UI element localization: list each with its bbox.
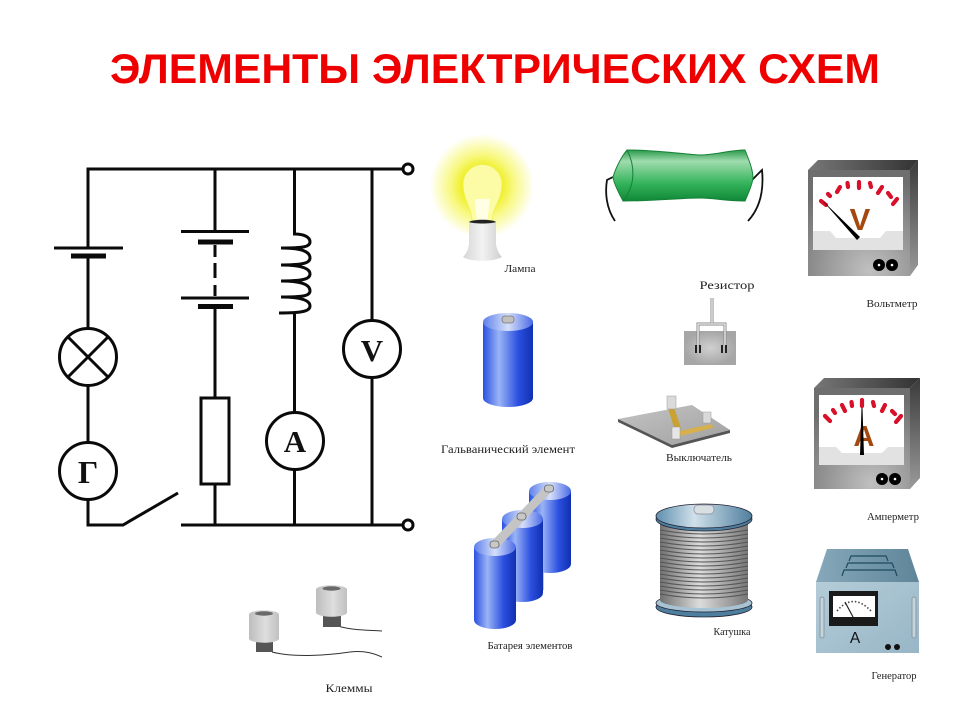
upper flange: [656, 507, 752, 531]
connector tabs: [503, 565, 544, 624]
generator: [816, 549, 919, 682]
label: Резистор: [700, 278, 754, 292]
voltmeter: [808, 160, 918, 310]
connector strap: [491, 485, 552, 548]
right clamp: [316, 585, 347, 627]
letter: A: [854, 421, 875, 453]
generator symbol: Г: [78, 454, 98, 490]
ammeter symbol: A: [284, 424, 307, 459]
label: Амперметр: [867, 512, 919, 523]
dial: [813, 177, 903, 250]
knobs: [885, 644, 900, 650]
terminals: [490, 485, 554, 548]
label: Клеммы: [326, 683, 373, 695]
case: [808, 160, 918, 170]
bulb: [463, 164, 502, 221]
terminals (clamps): [249, 585, 382, 695]
handles: [820, 597, 916, 638]
galvanic cell: [441, 313, 575, 456]
vents: [842, 556, 897, 576]
coil symbol: [279, 169, 310, 412]
voltmeter symbol: [344, 169, 400, 525]
circuit diagram: [54, 164, 413, 530]
resistor symbol: [201, 398, 229, 525]
coil: [656, 504, 752, 638]
source symbol: [54, 248, 123, 329]
cell body: [483, 322, 533, 407]
gauge: [829, 591, 878, 626]
label: Батарея элементов: [488, 640, 572, 652]
cell 2: [502, 510, 543, 602]
left clamp: [249, 610, 279, 652]
cell 3: [529, 482, 571, 573]
battery symbol: [181, 169, 249, 398]
ammeter symbol: [266, 412, 324, 525]
label: Генератор: [872, 671, 916, 682]
scale ticks: [821, 182, 897, 205]
label: Выключатель: [666, 452, 732, 464]
label: Гальванический элемент: [441, 444, 575, 456]
wires: [272, 626, 382, 657]
needle: [860, 408, 864, 455]
switch illustration: [618, 298, 736, 464]
dial: [819, 395, 904, 465]
terminal: [502, 316, 514, 323]
toggle switch on plate: [618, 396, 730, 448]
knobs: [873, 259, 898, 271]
scale ticks: [825, 400, 901, 422]
knife switch: [684, 298, 736, 365]
label: Лампа: [504, 264, 536, 275]
housing: [816, 549, 919, 582]
top wire with terminal: [88, 164, 413, 248]
needle: [822, 200, 860, 240]
body: [613, 150, 753, 201]
generator symbol: [60, 442, 116, 500]
lamp symbol: [60, 328, 116, 443]
lamp base: [463, 222, 502, 261]
letter: A: [850, 630, 861, 647]
switch: [88, 493, 178, 525]
cell 1: [474, 538, 516, 629]
cap: [694, 505, 714, 514]
label: Катушка: [714, 627, 751, 638]
glow: [430, 134, 534, 238]
leads: [606, 170, 762, 221]
knobs: [876, 473, 901, 485]
battery of cells: [474, 482, 572, 652]
letter: V: [850, 202, 871, 237]
case: [814, 378, 920, 388]
resistor: [606, 150, 762, 292]
title: ЭЛЕМЕНТЫ ЭЛЕКТРИЧЕСКИХ СХЕМ: [110, 45, 880, 92]
winding: [660, 522, 748, 608]
voltmeter symbol: V: [361, 333, 384, 368]
bottom wire with terminal: [181, 520, 413, 530]
lower flange: [656, 597, 752, 617]
lamp: [430, 134, 536, 275]
label: Вольтметр: [866, 299, 918, 310]
ammeter: [814, 378, 920, 523]
